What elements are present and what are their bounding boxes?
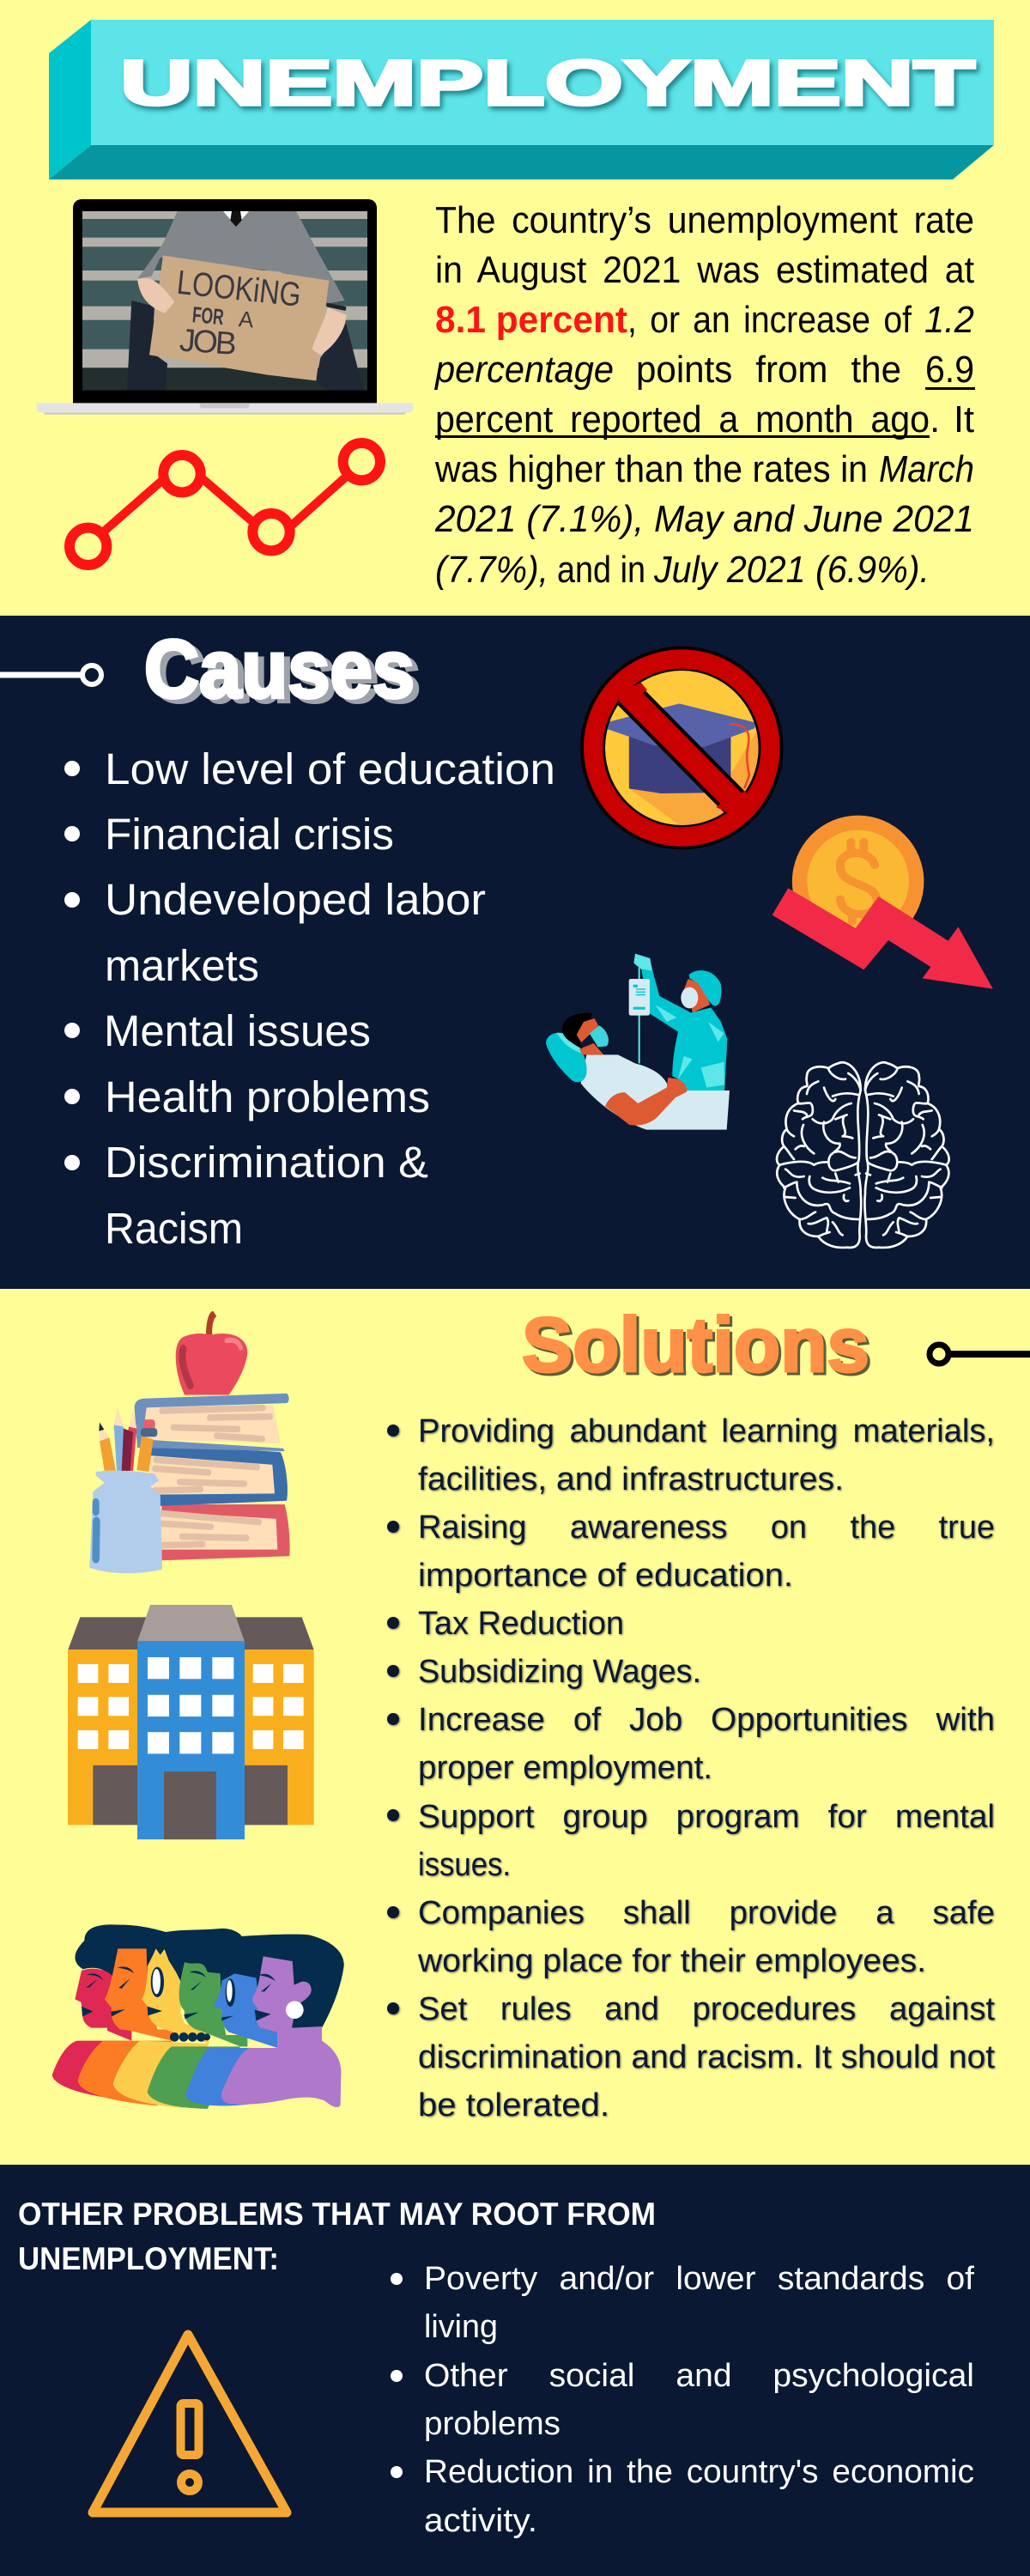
other problems heading — [18, 2196, 656, 2276]
intro paragraph: The country’s unemployment rate — [435, 199, 974, 241]
other problems list: activity. — [424, 2503, 537, 2539]
solutions list: working place for their employees. — [417, 1943, 926, 1979]
intro paragraph: July 2021 (6.9%). — [653, 549, 930, 591]
other problems list — [391, 2261, 974, 2539]
intro paragraph: percent reported a month ago — [435, 398, 930, 440]
panel: causes — [0, 616, 1030, 1289]
intro paragraph: points from the — [636, 349, 901, 391]
icon: laptop showing person looking for a job: FOR — [191, 301, 225, 330]
intro paragraph: 6.9 — [925, 349, 974, 391]
solutions list: facilities, and infrastructures. — [418, 1461, 844, 1498]
solutions heading: Solutions — [522, 1303, 869, 1388]
solutions list: Support group program for mental — [418, 1799, 995, 1835]
icon: no graduation cap — [580, 647, 783, 849]
icon: brain outline — [777, 1062, 949, 1248]
solutions list: Set rules and procedures against — [418, 1991, 995, 2027]
solutions list: Subsidizing Wages. — [418, 1654, 701, 1690]
causes list: Low level of education — [105, 744, 555, 793]
causes connector — [0, 665, 101, 684]
intro paragraph: . — [930, 398, 940, 440]
icon: laptop showing person looking for a job: A — [238, 306, 255, 333]
intro paragraph: 8.1 percent — [435, 299, 627, 341]
solutions list: Raising awareness on the true — [418, 1510, 995, 1546]
icon: office building — [68, 1605, 314, 1839]
icon: books, apple and pencil jar — [89, 1311, 290, 1573]
intro paragraph: was higher than the rates in — [434, 448, 868, 490]
icon: rainbow diverse people profiles — [52, 1924, 344, 2109]
icon: red line chart — [70, 443, 380, 565]
causes list: Undeveloped labor — [105, 875, 486, 924]
sign text: LOOKiNG — [175, 264, 303, 314]
solutions connector — [930, 1345, 1030, 1364]
solutions list: Providing abundant learning materials, — [418, 1413, 995, 1449]
solutions list: Increase of Job Opportunities with — [418, 1702, 995, 1738]
icon: falling dollar coin with arrow — [772, 816, 993, 989]
other problems list: living — [424, 2309, 498, 2345]
other problems heading: UNEMPLOYMENT: — [18, 2241, 279, 2276]
panel: header and introduction — [37, 20, 994, 591]
solutions list: Companies shall provide a safe — [418, 1895, 995, 1931]
causes list: markets — [105, 941, 259, 990]
intro paragraph: and in — [557, 549, 645, 591]
solutions list: issues. — [418, 1847, 511, 1883]
other problems list: Other social and psychological — [424, 2358, 974, 2394]
icon: laptop showing person looking for a job: JOB — [179, 321, 238, 361]
solutions list: be tolerated. — [418, 2087, 609, 2123]
intro paragraph: 2021 (7.1%), May and June 2021 — [434, 498, 974, 540]
title: UNEMPLOYMENT — [120, 47, 975, 118]
solutions list: Tax Reduction — [418, 1606, 624, 1642]
other problems heading: OTHER PROBLEMS THAT MAY ROOT FROM — [18, 2196, 656, 2232]
intro paragraph: 1.2 — [924, 299, 974, 341]
causes list — [64, 744, 555, 1253]
intro paragraph: (7.7%), — [435, 549, 548, 591]
causes list: Mental issues — [104, 1006, 371, 1055]
intro paragraph — [433, 199, 975, 591]
intro paragraph: in August 2021 was estimated at — [435, 249, 974, 291]
intro paragraph: , or an increase of — [627, 299, 912, 341]
title banner — [49, 20, 994, 179]
icon: laptop showing person looking for a job — [37, 199, 413, 415]
causes list: Racism — [105, 1204, 243, 1253]
causes list: Financial crisis — [105, 810, 394, 859]
causes list: Health problems — [105, 1072, 430, 1121]
intro paragraph: percentage — [433, 349, 614, 391]
causes heading: Causes — [144, 623, 415, 715]
other problems list: Poverty and/or lower standards of — [424, 2261, 974, 2297]
intro paragraph: March — [879, 448, 974, 490]
icon: warning triangle — [93, 2335, 287, 2512]
solutions list — [387, 1413, 995, 2123]
causes list: Discrimination & — [105, 1138, 428, 1187]
intro paragraph: It — [954, 398, 974, 440]
solutions list: importance of education. — [418, 1558, 793, 1594]
solutions list: discrimination and racism. It should not — [418, 2039, 995, 2075]
other problems list: Reduction in the country's economic — [424, 2454, 974, 2490]
solutions list: proper employment. — [418, 1750, 712, 1786]
other problems list: problems — [424, 2406, 560, 2442]
panel: solutions — [0, 1289, 1030, 2165]
panel: other problems — [0, 2165, 1030, 2576]
icon: doctor and patient — [546, 954, 730, 1130]
